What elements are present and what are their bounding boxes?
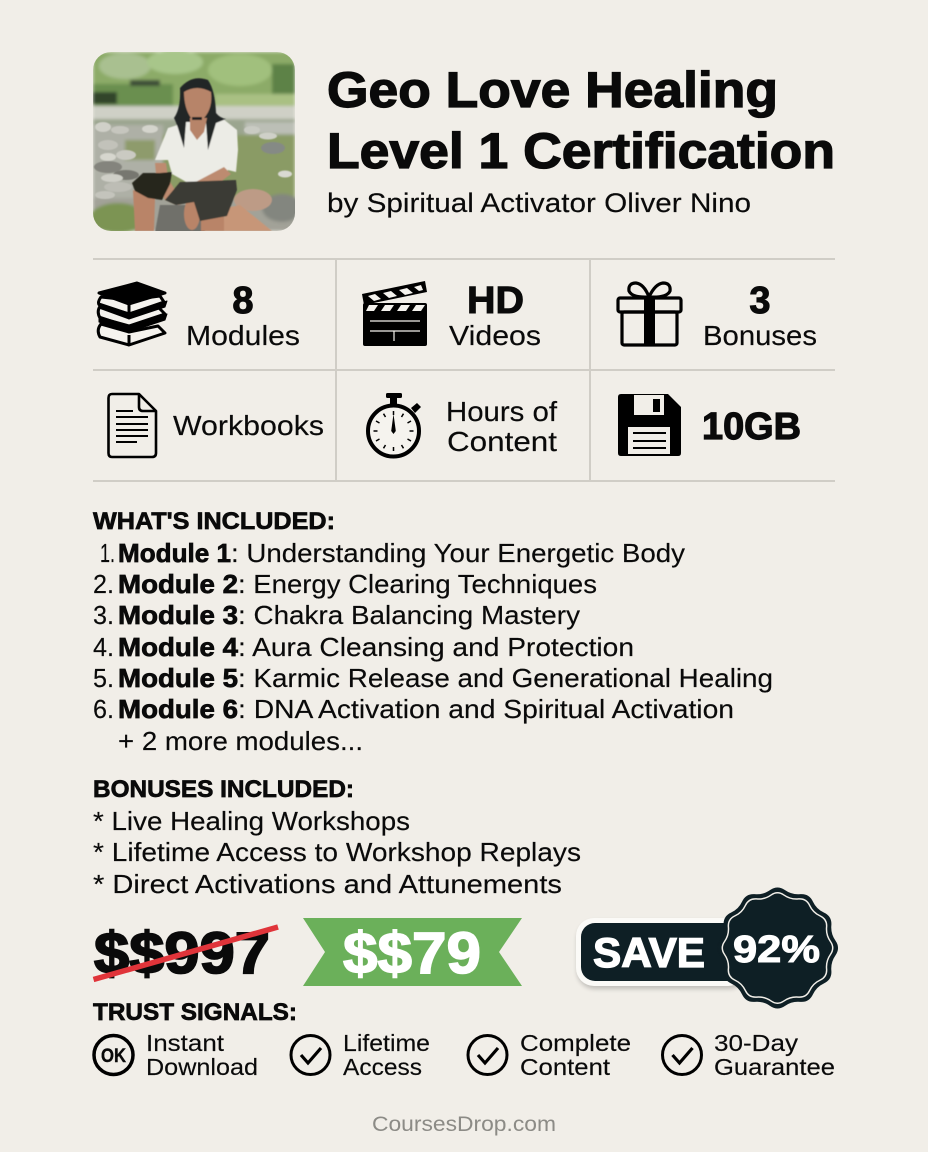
stat: 8 Modules (186, 280, 300, 351)
shorts (132, 172, 172, 200)
section: what's included (93, 508, 773, 756)
trust item: 30-day guarantee: Guarantee (714, 1054, 835, 1080)
section: trust signals (93, 999, 835, 1080)
label: Workbooks: Workbooks (173, 410, 324, 441)
old price struck through: $$997 (94, 921, 270, 986)
module list: : DNA Activation and Spiritual Activation (238, 694, 734, 724)
label: Hours of Content: Content (447, 426, 557, 457)
icon: document (108, 394, 156, 457)
new price ribbon (303, 918, 522, 986)
module list: Module 4 (118, 632, 239, 662)
module list (93, 538, 773, 756)
icon: stopwatch (368, 393, 421, 456)
bonus list: * Live Healing Workshops (93, 806, 410, 836)
icon: stack of books (98, 283, 167, 345)
module list: Module 6 (118, 694, 238, 724)
trust item: 30-day guarantee: 30-Day (714, 1030, 798, 1056)
save badge (576, 888, 838, 1008)
trust item: instant download: Download (146, 1054, 258, 1080)
trust item: lifetime access (291, 1030, 430, 1080)
module list: : Understanding Your Energetic Body (231, 538, 685, 568)
module list: + 2 more modules... (118, 726, 363, 756)
cell: 3 bonuses (618, 280, 817, 351)
heading: trust signals: TRUST SIGNALS: (93, 999, 297, 1026)
cell: 10GB (618, 394, 801, 456)
heading: bonuses included: BONUSES INCLUDED: (93, 776, 354, 803)
legs (133, 190, 155, 231)
icon: gift box (618, 283, 681, 345)
stats grid (93, 259, 835, 481)
stat: 8 Modules: Modules (186, 320, 300, 351)
trust item: 30-day guarantee (662, 1030, 835, 1080)
photo: man sitting on river rocks (90, 50, 302, 233)
stat: HD Videos (449, 280, 541, 351)
section: bonuses included (93, 776, 581, 899)
forearms and hands (154, 162, 175, 200)
face (184, 88, 211, 121)
bonus list (93, 806, 581, 899)
trust item: complete content (468, 1030, 631, 1080)
module list: : Aura Cleansing and Protection (238, 632, 634, 662)
stat: 8 Modules: 8 (232, 280, 254, 322)
trust item: lifetime access: Lifetime (343, 1030, 430, 1056)
icon: clapperboard (362, 281, 427, 346)
title: Level 1 Certification (327, 123, 835, 179)
title: Geo Love Healing (327, 62, 778, 118)
module list: 5. (93, 663, 114, 693)
trust item: instant download (94, 1030, 258, 1080)
stat: 3 Bonuses (703, 280, 817, 351)
save badge: SAVE (593, 929, 705, 976)
pricing row (94, 888, 838, 1008)
cell: HD videos (362, 280, 541, 351)
module list: Module 1 (118, 538, 231, 568)
footer: CoursesDrop.com (372, 1113, 556, 1136)
module list: 4. (93, 632, 114, 662)
cell: hours of content (368, 393, 557, 457)
subtitle: by Spiritual Activator Oliver Nino (327, 188, 751, 218)
trust item: complete content: Content (520, 1054, 611, 1080)
neck (190, 118, 207, 140)
stat: 3 Bonuses: 3 (749, 280, 771, 322)
icon: floppy disk (618, 394, 681, 456)
stat: HD Videos: Videos (449, 320, 541, 351)
module list: 6. (93, 694, 114, 724)
trust item: instant download: OK (101, 1046, 126, 1067)
trust item: complete content: Complete (520, 1030, 631, 1056)
bonus list: * Lifetime Access to Workshop Replays (93, 837, 581, 867)
stat: HD Videos: HD (467, 280, 524, 322)
label: 10GB: 10GB (702, 406, 801, 448)
label: Hours of Content (446, 396, 557, 457)
hair (174, 78, 226, 150)
header (90, 50, 835, 233)
title (327, 62, 835, 179)
module list: Module 5 (118, 663, 238, 693)
heading: what's included: WHAT'S INCLUDED: (93, 508, 335, 535)
trust item: instant download: Instant (146, 1030, 225, 1056)
module list: 1. (100, 538, 115, 568)
stat: 3 Bonuses: Bonuses (703, 320, 817, 351)
module list: 3. (93, 600, 114, 630)
starburst: 92%: 92% (733, 929, 820, 971)
shirt (155, 118, 238, 184)
starburst: 92% (717, 888, 838, 1008)
cell: 8 modules (98, 280, 300, 351)
module list: : Energy Clearing Techniques (238, 569, 597, 599)
module list: Module 3 (118, 600, 238, 630)
cell: workbooks (108, 394, 324, 457)
module list: 2. (93, 569, 114, 599)
label: Hours of Content: Hours of (446, 396, 557, 427)
module list: Module 2 (118, 569, 238, 599)
module list: : Chakra Balancing Mastery (238, 600, 580, 630)
new price ribbon: $$79 (343, 921, 481, 986)
module list: : Karmic Release and Generational Healing (238, 663, 773, 693)
bonus list: * Direct Activations and Attunements (93, 869, 562, 899)
trust item: lifetime access: Access (343, 1054, 422, 1080)
